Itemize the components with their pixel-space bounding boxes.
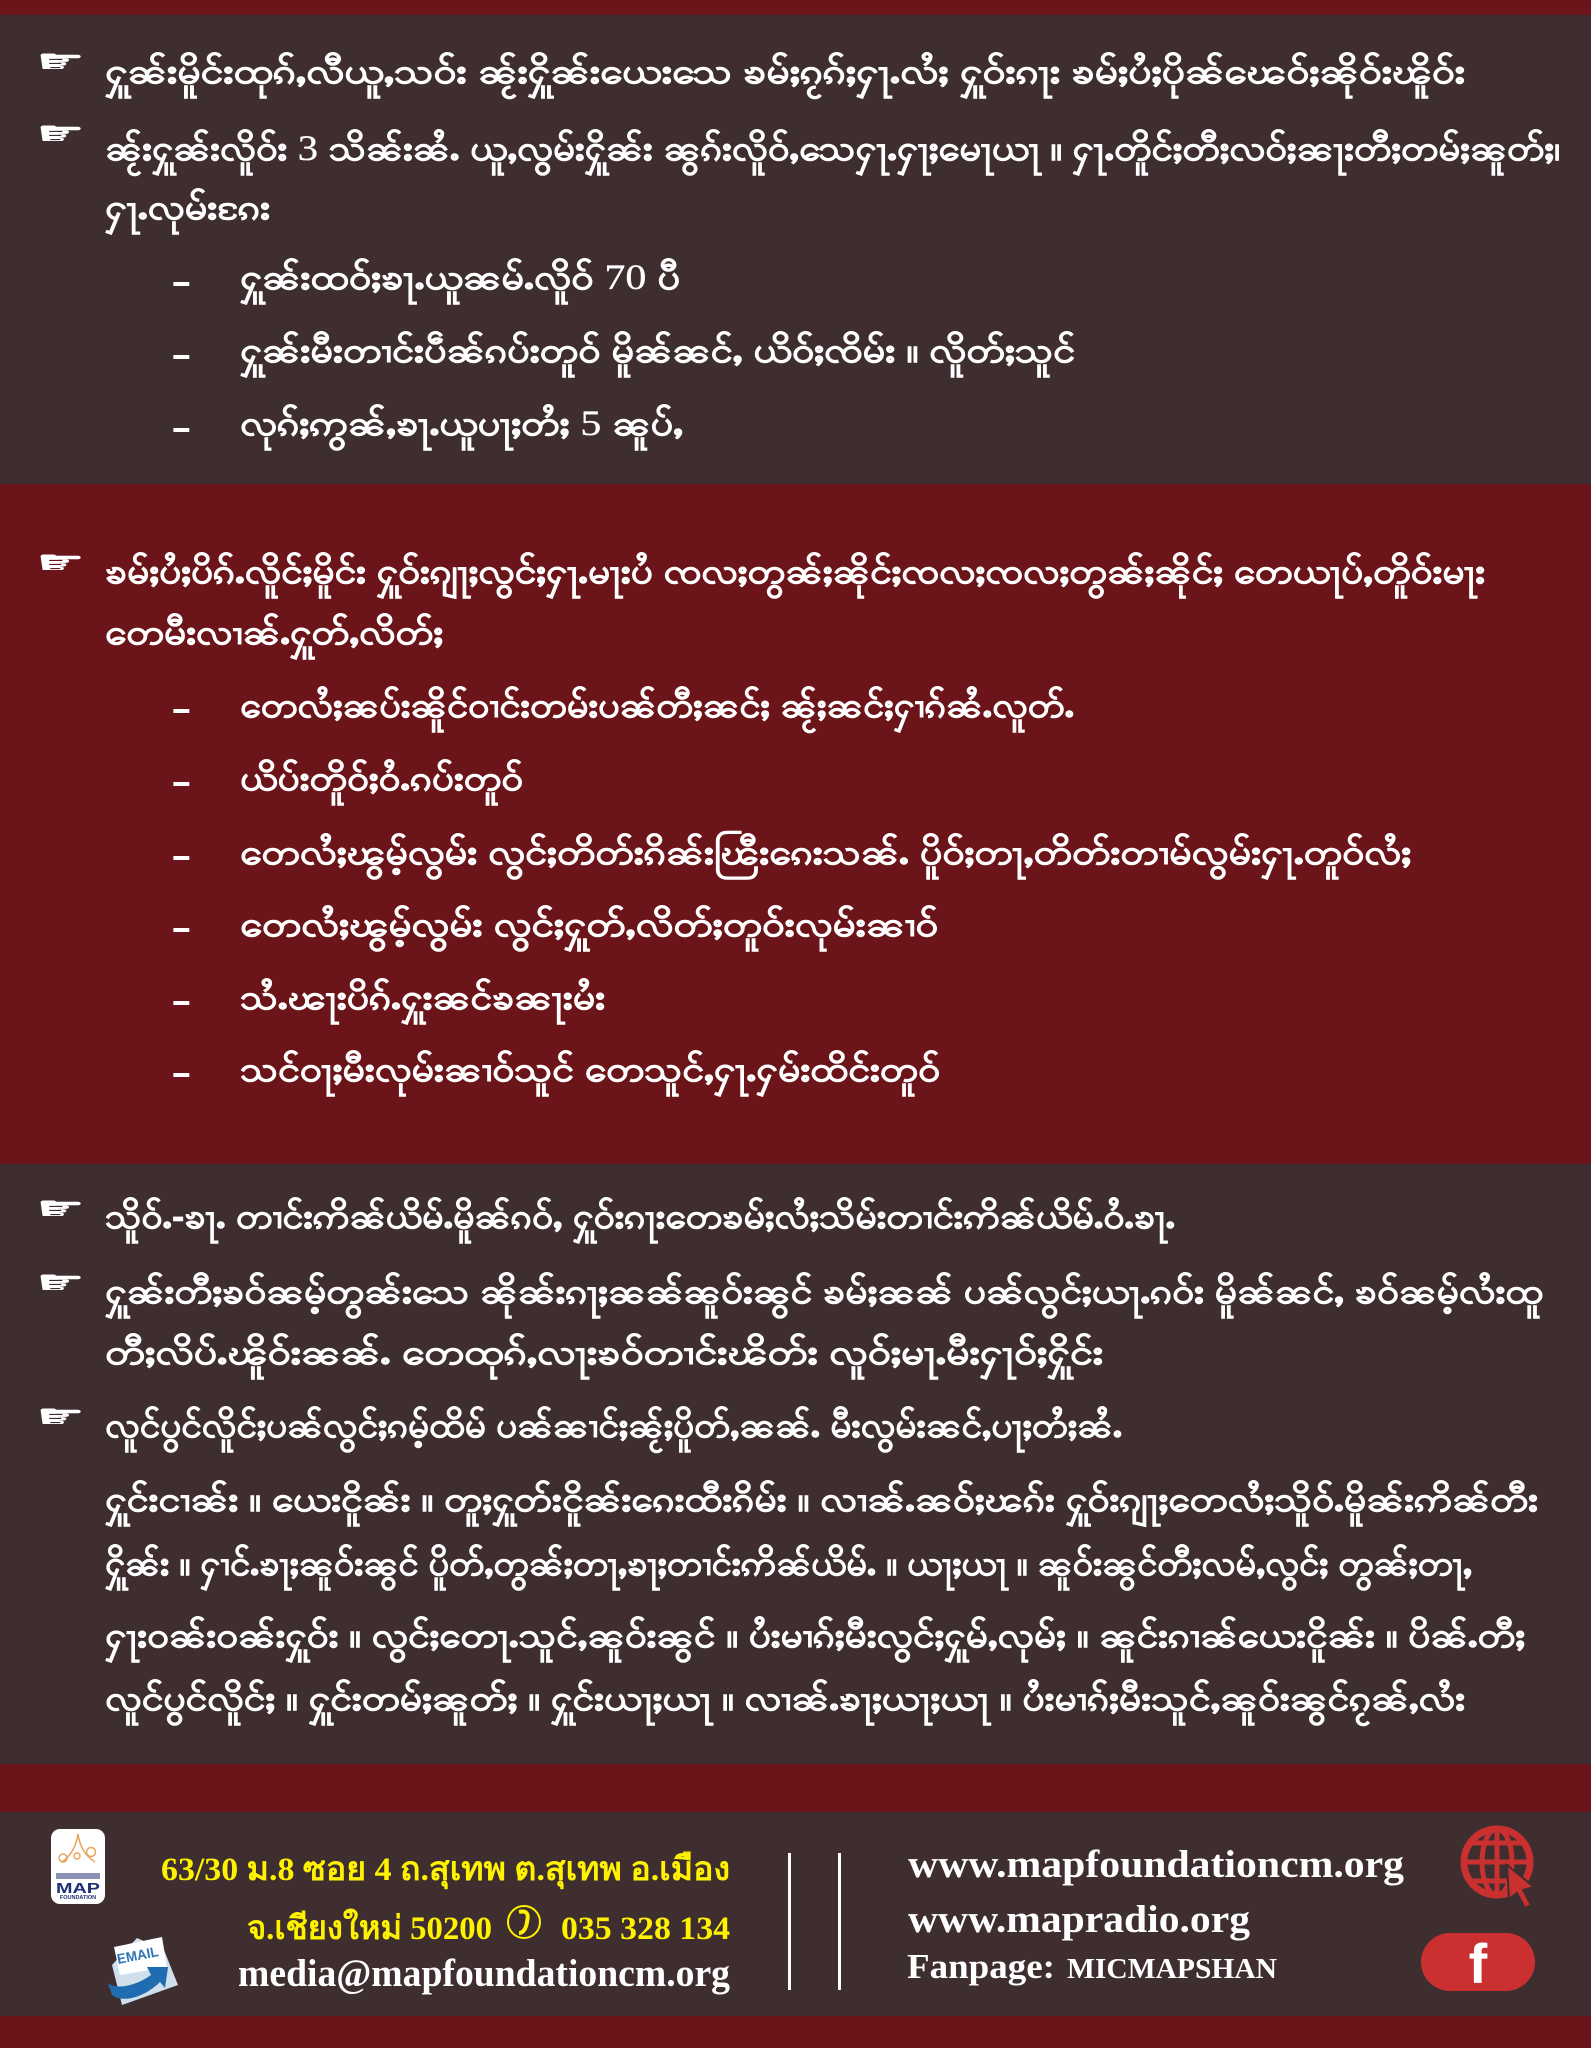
text block: government measures (105, 1406, 1538, 1726)
text block: going out intro (105, 552, 1485, 660)
text block: going out intro: တေမီးလၢၼ်ႉႁူတ်ႇလိတ်ႈ (105, 613, 443, 660)
list: precautions: – (173, 985, 190, 1018)
icon: email envelope: EMAIL (116, 1943, 160, 1967)
text block: buying food: သိူဝ်ႉ-ၶႃႉ တၢင်းဢိၼ်ယိမ်ႉမိူၼ်ၵဝ်ႇ ႁူဝ်းၵႃးတေၶမ်ႈလႆႈသိမ်းတၢင်းဢိၼ်ယိမ်ႉဝႆႉၶႃႉ (105, 1197, 1175, 1244)
text block: government measures: လူင်ပွင်လိူင်ႈပၼ်လွင်ႈၵမ့်ထိမ် ပၼ်ၼၢင်ႈၼႂ်ႈပိူတ်ႇၼၼ်ႉ မီးလွမ်းၼင်ႇပႃႈတႆႈၼႆႉ (105, 1406, 1122, 1453)
website link: www.mapfoundationcm.org (908, 1843, 1405, 1886)
email address: media@mapfoundationcm.org (238, 1952, 730, 1995)
dividers (788, 1853, 841, 1990)
text block: second advice: ၼႂ်းႁူၼ်းလိူဝ်း 3 သိၼ်းၼႆႉ ယူႇလွမ်းႁိူၼ်း ၼွၵ်းလိူဝ်ႇသေႁႃႉႁႃႈမေႃယႃ ။ ႁႃႉတိူင်ႈတီႈလဝ်ႈၼႃးတီႈတမ်ႈၼူတ်ႈ၊ (105, 128, 1560, 176)
icon: facebook (1421, 1932, 1535, 1995)
icon: pointing hand: ☛ (36, 1189, 85, 1228)
list: precautions: တေလႆႈၽွမ့်လွမ်း လွင်ႈတိတ်းၵိၼ်းၽြီးၵေးသၼ်ႉ ပိူဝ်ႈတႃႇတိတ်းတၢမ်လွမ်းႁႃႉတူဝ်လႆႈ (240, 832, 1411, 880)
list: risk groups: ႁူၼ်းထဝ်ႈၶႃႉယူၼမ်ႉလိူဝ် 70 ပီ (240, 257, 680, 305)
list: precautions: သင်ဝႃႈမီးလုမ်းၼၢဝ်သူင် တေသူင်ႇႁႃႉႁမ်းထိင်းတူဝ် (240, 1050, 940, 1097)
icon: globe with cursor (1464, 1829, 1534, 1908)
list: risk groups (173, 257, 1075, 451)
list: risk groups: – (173, 412, 190, 445)
list: risk groups: – (173, 266, 190, 299)
text block: medicine advice (105, 1272, 1543, 1380)
list: risk groups: လုၵ်ႈဢွၼ်ႇၶႃႉယူပႃႈတႆႈ 5 ၼူပ်ႇ (240, 403, 683, 451)
address line 2 and phone: จ.เชียงใหม่ 50200 (247, 1908, 492, 1947)
fanpage (907, 1947, 1277, 1986)
icon: email envelope (108, 1937, 178, 2005)
panel: going outside advice (0, 484, 1591, 1164)
icon: pointing hand: ☛ (36, 1397, 85, 1436)
icon: pointing hand: ☛ (36, 543, 85, 582)
icon: pointing hand: ☛ (36, 42, 85, 81)
list: precautions: – (173, 912, 190, 945)
icon: pointing hand: ☛ (36, 114, 85, 153)
list: precautions: တေလႆႈၽွမ့်လွမ်း လွင်ႈႁူတ်ႇလိတ်ႈတူဝ်းလုမ်းၼၢဝ် (240, 905, 938, 952)
address line 1: 63/30 ม.8 ซอย 4 ถ.สุเทพ ต.สุเทพ อ.เมือง (161, 1851, 730, 1890)
text block: government measures: ႁိူၼ်း ။ ႁၢင်ႉၶႃႈၼူဝ်းၼွင် ပိူတ်ႇတွၼ်ႈတႃႇၶႃႈတၢင်းဢိၼ်ယိမ်ႉ ။ ယႃႈယႃ ။ ၼူဝ်းၼွင်တီႈလမ်ႇလွင်ႈ တွၼ်ႈတႃႇ (105, 1544, 1472, 1591)
panel: shopping and food advice (0, 1164, 1591, 1764)
list: precautions: – (173, 1057, 190, 1090)
list: precautions: – (173, 693, 190, 726)
icon: MAP Foundation logo (51, 1829, 105, 1904)
text block: second advice: ႁႃႉလုမ်းၵႄး (105, 188, 270, 235)
text block: government measures: ႁႃးဝၼ်းဝၼ်းႁူဝ်း ။ လွင်ႈတေႃႉသူင်ႇၼူဝ်းၼွင် ။ ပႆးမၢၵ်ႈမီးလွင်ႈႁူမ်ႇလုမ်ႈ ။ ၼူင်းၵၢၼ်ယေးငိူၼ်း ။ ပိၼ်ႉတီႈ (105, 1616, 1525, 1663)
list: risk groups: – (173, 339, 190, 372)
fanpage: Fanpage: (907, 1947, 1055, 1986)
list: precautions: – (173, 840, 190, 873)
text block: medicine advice: ႁူၼ်းတီႈၶဝ်ၼမ့်တွၼ်းသေ ၼိုၼ်းၵႃႈၼၼ်ၼူဝ်းၼွင် ၶမ်ႈၼၼ် ပၼ်လွင်ႈယႃႉၵဝ်း မိူၼ်ၼင်ႇ ၶဝ်ၼမ့်လႆးထူ (105, 1272, 1543, 1319)
text block: government measures: လူင်ပွင်လိူင်ႈ ။ ႁူင်းတမ်ႈၼူတ်ႈ ။ ႁူင်းယႃႈယႃ ။ လၢၼ်ႉၶႃႈယႃႈယႃ ။ ပႆးမၢၵ်ႈမီးသူင်ႇၼူဝ်းၼွင်ၵႂၼ်ႇလႆး (105, 1679, 1465, 1726)
icon: facebook: f (1469, 1932, 1488, 1995)
list: precautions: – (173, 766, 190, 799)
radio link: www.mapradio.org (908, 1898, 1251, 1941)
text block: going out intro: ၶမ်ႈပႆႈပိၵ်ႉလိူင်ႈမိူင်း ႁူဝ်းၵျႃႈလွင်ႈႁႃႉမႃးပႆ ၸလႈတွၼ်ႈၼိုင်ႈၸလႈၸလႈတွၼ်ႈၼိုင်ႈ တေယႃပ်ႇတိူဝ်းမႃး (105, 552, 1485, 599)
fanpage: MICMAPSHAN (1067, 1954, 1277, 1985)
list: precautions: တေလႆႈၼပ်းၼိူင်ဝၢင်းတမ်းပၼ်တီႈၼင်ႈ ၼႂ်ႈၼင်ႈႁၢၵ်ၼႆႉလူတ်ႉ (240, 686, 1074, 733)
icon: MAP Foundation logo: FOUNDATION (60, 1895, 96, 1901)
list: precautions (173, 686, 1411, 1097)
address line 2 and phone (247, 1906, 730, 1947)
icon: pointing hand: ☛ (36, 1263, 85, 1302)
text block: first advice line: ႁူၼ်းမိူင်းထုၵ်ႇလီယူႇသဝ်း ၼႂ်းႁိူၼ်းယေးသေ ၶမ်ႈၵႂၵ်ႈႁႃႉလႆႈ ႁူဝ်းၵႃး ၶမ်ႈပႆႈပိုၼ်ၽေဝ်ႈၼိုဝ်းၽိူဝ်း (105, 52, 1465, 99)
address line 2 and phone: 035 328 134 (561, 1911, 730, 1947)
text block: medicine advice: တီႈလိပ်ႉၽိူဝ်းၼၼ်ႉ တေထုၵ်ႇလႃးၶဝ်တၢင်းၽိတ်း လူဝ်ႈမႃႉမီးႁႃဝ်ႈႁိူင်း (105, 1333, 1103, 1380)
list: precautions: သႆႉၽႃးပိၵ်ႉႁူးၼင်ၶၼႃးမႆး (240, 978, 605, 1025)
text block: government measures: ႁူင်းငၢၼ်း ။ ယေးငိူၼ်း ။ တူႈႁူတ်းငိူၼ်းၵေးထီးၵိမ်း ။ လၢၼ်ႉၼဝ်ႈၽၵ်း ႁူဝ်းၵျႃႈတေလႆႈသိူဝ်ႉမိူၼ်းဢိၼ်တီး (105, 1480, 1538, 1527)
list: precautions: ယိပ်းတိူဝ်ႈဝႆႉၵပ်းတူဝ် (240, 759, 523, 806)
panel: contact footer (0, 1812, 1591, 2016)
panel: stay home advice (0, 15, 1591, 484)
text block: second advice (105, 128, 1560, 235)
list: risk groups: ႁူၼ်းမီးတၢင်းပဵၼ်ၵပ်းတူဝ် မိူၼ်ၼင်ႇ ယိဝ်ႈၸိမ်း ။ လိူတ်ႈသူင် (240, 331, 1075, 378)
icon: MAP Foundation logo: MAP (56, 1880, 100, 1897)
